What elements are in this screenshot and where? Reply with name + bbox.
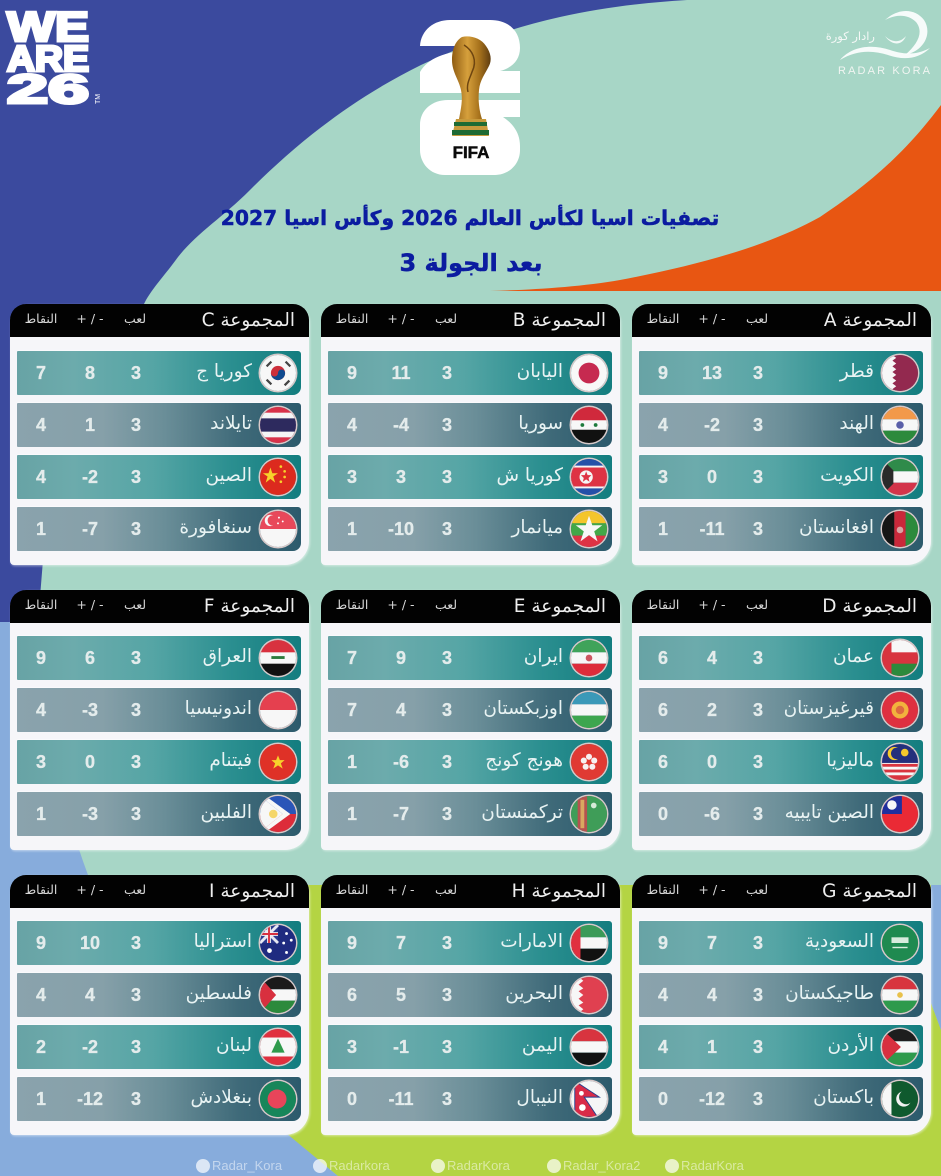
panel: group A	[632, 304, 931, 565]
row: Myanmar: -10	[388, 519, 414, 539]
row: Chinese Taipei: 3	[753, 804, 763, 824]
row: Syria: 4	[347, 415, 357, 435]
row: Turkmenistan: تركمنستان	[481, 802, 563, 823]
header: group F: المجموعة F	[204, 596, 295, 617]
row: India: 3	[753, 415, 763, 435]
row: Myanmar: ميانمار	[511, 517, 563, 538]
header: group H: المجموعة H	[512, 881, 606, 902]
row: Oman: 6	[658, 648, 668, 668]
row: Malaysia	[639, 740, 923, 784]
row: Malaysia: ماليزيا	[826, 750, 874, 771]
logo: FIFA World Cup 26: FIFA	[453, 143, 489, 162]
row: UAE: 9	[347, 933, 357, 953]
row: India: 4	[658, 415, 668, 435]
row: Pakistan: -12	[699, 1089, 725, 1109]
row: Australia: 9	[36, 933, 46, 953]
row: India: -2	[704, 415, 720, 435]
row: Yemen: 3	[442, 1037, 452, 1057]
logo: FIFA World Cup 26	[420, 20, 520, 175]
row: South Korea	[17, 351, 301, 395]
row: Nepal	[328, 1077, 612, 1121]
row: Singapore: 3	[131, 519, 141, 539]
row: Pakistan: 3	[753, 1089, 763, 1109]
header: group B: المجموعة B	[513, 310, 606, 331]
row: Qatar: قطر	[840, 361, 874, 382]
header: group H	[321, 875, 620, 908]
panel: group G	[632, 875, 931, 1135]
row: Syria: سوريا	[518, 413, 563, 434]
row: Palestine: 4	[85, 985, 95, 1005]
rows: group I	[17, 921, 301, 1121]
rows: group A	[639, 351, 923, 551]
header: group D: + / -	[698, 597, 726, 612]
row: Iran: 3	[442, 648, 452, 668]
rows: group E	[328, 636, 612, 836]
row: Chinese Taipei: الصين تايبيه	[785, 802, 874, 823]
row: Chinese Taipei: 0	[658, 804, 668, 824]
row: Kyrgyzstan	[639, 688, 923, 732]
row: Palestine	[17, 973, 301, 1017]
header: group C: المجموعة C	[202, 310, 295, 331]
row: UAE: الامارات	[500, 931, 563, 952]
social: Threads: Radarkora	[329, 1158, 390, 1173]
row: Bangladesh: -12	[77, 1089, 103, 1109]
header: group E: + / -	[387, 597, 415, 612]
row: South Korea: 8	[85, 363, 95, 383]
row: Jordan	[639, 1025, 923, 1069]
row: Nepal: -11	[388, 1089, 414, 1109]
row: Bangladesh	[17, 1077, 301, 1121]
row: Jordan: 3	[753, 1037, 763, 1057]
row: Tajikistan: طاجيكستان	[785, 983, 874, 1004]
row: India	[639, 403, 923, 447]
row: Pakistan	[639, 1077, 923, 1121]
row: Chinese Taipei: -6	[704, 804, 720, 824]
row: Tajikistan: 3	[753, 985, 763, 1005]
row: Bahrain	[328, 973, 612, 1017]
row: Vietnam: 0	[85, 752, 95, 772]
row: Bahrain: 5	[396, 985, 406, 1005]
row: Afghanistan: افغانستان	[799, 517, 874, 538]
row: Japan: 11	[391, 363, 411, 383]
header: group C: النقاط	[25, 311, 57, 326]
row: North Korea: 3	[442, 467, 452, 487]
row: Qatar: 13	[702, 363, 722, 383]
row: Yemen: اليمن	[522, 1035, 563, 1056]
header: group I: لعب	[124, 882, 146, 897]
row: Uzbekistan: 4	[396, 700, 406, 720]
row: Malaysia: 6	[658, 752, 668, 772]
panel: group F	[10, 590, 309, 850]
row: Uzbekistan: 3	[442, 700, 452, 720]
row: Singapore	[17, 507, 301, 551]
row: South Korea: 3	[131, 363, 141, 383]
icon: trophy	[452, 36, 491, 136]
row: Kuwait: 0	[707, 467, 717, 487]
header: group G: + / -	[698, 882, 726, 897]
row: Pakistan: باكستان	[813, 1087, 874, 1108]
row: Yemen	[328, 1025, 612, 1069]
row: China: -2	[82, 467, 98, 487]
row: Iran: ايران	[524, 646, 563, 667]
row: Kuwait: الكويت	[820, 465, 874, 486]
row: Lebanon: 3	[131, 1037, 141, 1057]
row: UAE: 7	[396, 933, 406, 953]
row: Nepal: 3	[442, 1089, 452, 1109]
row: Palestine: 3	[131, 985, 141, 1005]
social: Telegram: Radar_Kora2	[563, 1158, 640, 1173]
header: group I	[10, 875, 309, 908]
row: Iran: 7	[347, 648, 357, 668]
row: Iraq: 9	[36, 648, 46, 668]
row: Qatar: 9	[658, 363, 668, 383]
row: Hong Kong: -6	[393, 752, 409, 772]
row: Kuwait: 3	[658, 467, 668, 487]
header: group I: المجموعة I	[209, 881, 295, 902]
row: Saudi Arabia	[639, 921, 923, 965]
row: UAE: 3	[442, 933, 452, 953]
row: Philippines: 3	[131, 804, 141, 824]
row: Philippines: -3	[82, 804, 98, 824]
header: group F: لعب	[124, 597, 146, 612]
header: group A: المجموعة A	[824, 310, 917, 331]
header: group A: النقاط	[647, 311, 679, 326]
row: China	[17, 455, 301, 499]
row: Australia: استراليا	[194, 931, 252, 952]
social: Snapchat: RadarKora	[447, 1158, 510, 1173]
row: Hong Kong: 1	[347, 752, 357, 772]
rows: group H	[328, 921, 612, 1121]
row: Yemen: 3	[347, 1037, 357, 1057]
header: group H: لعب	[435, 882, 457, 897]
row: Nepal: 0	[347, 1089, 357, 1109]
logo: We Are 26: WE	[7, 3, 89, 50]
row: Japan: اليابان	[517, 361, 563, 382]
header: group C: لعب	[124, 311, 146, 326]
header: group H: + / -	[387, 882, 415, 897]
row: Jordan: 1	[707, 1037, 717, 1057]
panel: group H	[321, 875, 620, 1135]
row: Bangladesh: بنغلادش	[190, 1087, 252, 1108]
logo: Radar Kora	[826, 11, 931, 77]
row: North Korea	[328, 455, 612, 499]
row: Afghanistan: 3	[753, 519, 763, 539]
panel: group C	[10, 304, 309, 565]
row: Saudi Arabia: السعودية	[805, 931, 874, 952]
row: Australia: 3	[131, 933, 141, 953]
row: Syria: -4	[393, 415, 409, 435]
row: Japan: 9	[347, 363, 357, 383]
panel: group B	[321, 304, 620, 565]
header: group F	[10, 590, 309, 623]
logo: We Are 26: 26	[7, 66, 89, 112]
row: Myanmar: 3	[442, 519, 452, 539]
row: Jordan: الأردن	[828, 1035, 874, 1056]
header: group I: النقاط	[25, 882, 57, 897]
row: Hong Kong: هونج كونج	[485, 750, 563, 771]
header: group F: + / -	[76, 597, 104, 612]
row: Singapore: سنغافورة	[179, 517, 252, 538]
row: Nepal: النيبال	[516, 1087, 563, 1108]
row: North Korea: كوريا ش	[496, 465, 563, 486]
row: Lebanon	[17, 1025, 301, 1069]
row: Kyrgyzstan: قيرغيزستان	[784, 698, 874, 719]
logo: Radar Kora: رادار كورة	[826, 29, 875, 44]
row: Iran: 9	[396, 648, 406, 668]
row: Indonesia: اندونيسيا	[185, 698, 252, 719]
row: Thailand: 4	[36, 415, 46, 435]
row: Bahrain: 3	[442, 985, 452, 1005]
row: Saudi Arabia: 3	[753, 933, 763, 953]
row: Bangladesh: 3	[131, 1089, 141, 1109]
row: Japan	[328, 351, 612, 395]
logo: We Are 26: ARE	[7, 38, 89, 79]
row: Oman: 4	[707, 648, 717, 668]
row: North Korea: 3	[347, 467, 357, 487]
row: Turkmenistan: 1	[347, 804, 357, 824]
row: Philippines: 1	[36, 804, 46, 824]
header: group E: المجموعة E	[514, 596, 606, 617]
row: Hong Kong	[328, 740, 612, 784]
header: group C: + / -	[76, 311, 104, 326]
panel: group I	[10, 875, 309, 1135]
row: Qatar: 3	[753, 363, 763, 383]
row: Saudi Arabia: 7	[707, 933, 717, 953]
subtitle: بعد الجولة 3	[400, 249, 542, 277]
header: group G: لعب	[746, 882, 768, 897]
header: group D	[632, 590, 931, 623]
title: تصفيات اسيا لكأس العالم 2026 وكأس اسيا 2027	[221, 206, 719, 230]
row: Qatar	[639, 351, 923, 395]
row: Kuwait	[639, 455, 923, 499]
row: Lebanon: -2	[82, 1037, 98, 1057]
row: China: الصين	[206, 465, 252, 486]
row: Malaysia: 3	[753, 752, 763, 772]
row: Afghanistan	[639, 507, 923, 551]
header: group E	[321, 590, 620, 623]
row: Australia	[17, 921, 301, 965]
row: Singapore: -7	[82, 519, 98, 539]
row: Uzbekistan	[328, 688, 612, 732]
row: Lebanon: 2	[36, 1037, 46, 1057]
row: Singapore: 1	[36, 519, 46, 539]
row: Iran	[328, 636, 612, 680]
row: Vietnam: 3	[36, 752, 46, 772]
header: group I: + / -	[76, 882, 104, 897]
rows: group G	[639, 921, 923, 1121]
row: Kyrgyzstan: 6	[658, 700, 668, 720]
row: Myanmar: 1	[347, 519, 357, 539]
row: Bahrain: 6	[347, 985, 357, 1005]
row: Vietnam	[17, 740, 301, 784]
header: group A: لعب	[746, 311, 768, 326]
row: Yemen: -1	[393, 1037, 409, 1057]
row: Lebanon: لبنان	[216, 1035, 252, 1056]
row: Thailand: 3	[131, 415, 141, 435]
row: Iraq: العراق	[203, 646, 252, 667]
header: group F: النقاط	[25, 597, 57, 612]
row: Myanmar	[328, 507, 612, 551]
row: Philippines: الفلبين	[200, 802, 252, 823]
row: Tajikistan: 4	[707, 985, 717, 1005]
row: South Korea: كوريا ج	[196, 361, 252, 382]
row: Kyrgyzstan: 3	[753, 700, 763, 720]
header: group A: + / -	[698, 311, 726, 326]
row: Pakistan: 0	[658, 1089, 668, 1109]
row: Tajikistan: 4	[658, 985, 668, 1005]
row: Japan: 3	[442, 363, 452, 383]
row: Jordan: 4	[658, 1037, 668, 1057]
row: Vietnam: 3	[131, 752, 141, 772]
row: Oman: عمان	[833, 646, 874, 667]
header: group A	[632, 304, 931, 337]
header: group G: النقاط	[647, 882, 679, 897]
header: group B: النقاط	[336, 311, 368, 326]
row: Iraq: 6	[85, 648, 95, 668]
row: Bangladesh: 1	[36, 1089, 46, 1109]
header: group D: لعب	[746, 597, 768, 612]
header: group G: المجموعة G	[822, 881, 917, 902]
row: Chinese Taipei	[639, 792, 923, 836]
row: UAE	[328, 921, 612, 965]
panel: group D	[632, 590, 931, 850]
row: Afghanistan: -11	[699, 519, 725, 539]
social: X: Radar_Kora	[212, 1158, 282, 1173]
logo: Radar Kora: RADAR KORA	[838, 65, 931, 77]
header: group E: لعب	[435, 597, 457, 612]
logo: We Are 26	[4, 3, 102, 112]
row: Syria	[328, 403, 612, 447]
row: Thailand: 1	[85, 415, 95, 435]
row: Thailand: تايلاند	[210, 413, 252, 434]
row: North Korea: 3	[396, 467, 406, 487]
row: Palestine: فلسطين	[186, 983, 252, 1004]
rows: group F	[17, 636, 301, 836]
row: Indonesia: -3	[82, 700, 98, 720]
header: group E: النقاط	[336, 597, 368, 612]
row: Turkmenistan: -7	[393, 804, 409, 824]
row: Palestine: 4	[36, 985, 46, 1005]
row: Philippines	[17, 792, 301, 836]
row: Uzbekistan: 7	[347, 700, 357, 720]
row: China: 3	[131, 467, 141, 487]
header: group G	[632, 875, 931, 908]
rows: group D	[639, 636, 923, 836]
row: Tajikistan	[639, 973, 923, 1017]
row: Syria: 3	[442, 415, 452, 435]
header: group D: المجموعة D	[822, 596, 917, 617]
row: Uzbekistan: اوزبكستان	[483, 698, 563, 719]
row: Hong Kong: 3	[442, 752, 452, 772]
row: Iraq	[17, 636, 301, 680]
row: Saudi Arabia: 9	[658, 933, 668, 953]
logo: We Are 26: TM	[95, 94, 102, 104]
row: Oman: 3	[753, 648, 763, 668]
row: India: الهند	[839, 413, 874, 434]
header: group B	[321, 304, 620, 337]
row: Vietnam: فيتنام	[209, 750, 252, 771]
header: group C	[10, 304, 309, 337]
row: South Korea: 7	[36, 363, 46, 383]
panel: group E	[321, 590, 620, 850]
header: group H: النقاط	[336, 882, 368, 897]
row: Malaysia: 0	[707, 752, 717, 772]
rows: group C	[17, 351, 301, 551]
row: Indonesia: 4	[36, 700, 46, 720]
row: Iraq: 3	[131, 648, 141, 668]
row: Oman	[639, 636, 923, 680]
row: Australia: 10	[80, 933, 100, 953]
row: China: 4	[36, 467, 46, 487]
header: group B: + / -	[387, 311, 415, 326]
row: Turkmenistan: 3	[442, 804, 452, 824]
row: Kuwait: 3	[753, 467, 763, 487]
row: Kyrgyzstan: 2	[707, 700, 717, 720]
header: group B: لعب	[435, 311, 457, 326]
row: Thailand	[17, 403, 301, 447]
social: Instagram: RadarKora	[681, 1158, 744, 1173]
row: Turkmenistan	[328, 792, 612, 836]
header: group D: النقاط	[647, 597, 679, 612]
row: Bahrain: البحرين	[505, 983, 563, 1004]
row: Indonesia	[17, 688, 301, 732]
rows: group B	[328, 351, 612, 551]
row: Afghanistan: 1	[658, 519, 668, 539]
row: Indonesia: 3	[131, 700, 141, 720]
